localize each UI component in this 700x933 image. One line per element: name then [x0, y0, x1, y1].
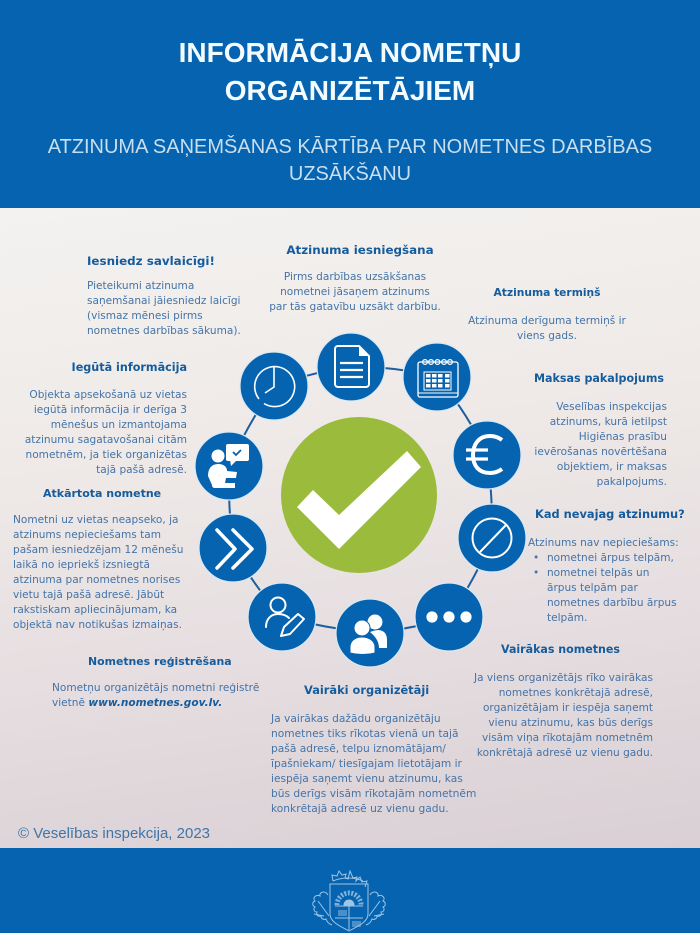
body: Atzinuma termiņš: Atzinuma derīguma termiņš ir: [468, 315, 626, 327]
icon: prohibited: [458, 504, 526, 572]
body: Kad nevajag atzinumu: [528, 537, 679, 624]
text block: Iegūtā informācija: [25, 361, 187, 476]
body: Vairākas nometnes: organizētājam ir iespēja saņemt: [483, 702, 653, 714]
icon: double chevron: [199, 514, 267, 582]
body: Vairāki organizētāji: nometnes tiks rīkotas vienā un tajā: [271, 727, 458, 740]
body: Atkārtota nometne: pašam iesniedzējam 12 mēnešu: [13, 544, 183, 556]
heading: Iegūtā informācija: Iegūtā informācija: [72, 361, 187, 374]
body: Atkārtota nometne: atzinums nepieciešams tam: [13, 529, 161, 541]
body: Atzinuma iesniegšana: [269, 271, 441, 313]
green centre circle with check mark: [281, 417, 437, 573]
body: Iegūtā informācija: iegūtā informācija ir derīga 3: [34, 404, 187, 416]
body: Iegūtā informācija: nometnēm, ja tiek organizētas: [26, 449, 187, 461]
text block: Atzinuma iesniegšana: [269, 243, 441, 313]
body: Iegūtā informācija: atzinumu sagatavošanai citām: [25, 434, 187, 446]
body: Vairāki organizētāji: īpašniekam/ tiesīgajam lietotājam ir: [271, 757, 462, 770]
heading: Kad nevajag atzinumu: Kad nevajag atzinumu?: [535, 507, 685, 521]
text block: Kad nevajag atzinumu: [528, 507, 685, 624]
body: Vairāki organizētāji: [270, 712, 476, 815]
text block: Atkārtota nometne: [13, 487, 183, 631]
body: Kad nevajag atzinumu: •: [533, 567, 539, 579]
body: Vairākas nometnes: nometnes konkrētajā adresē,: [499, 687, 653, 699]
body: Iegūtā informācija: Objekta apsekošanā uz vietas: [29, 389, 187, 401]
body: Iesniedz savlaicīgi: (vismaz mēnesi pirms: [87, 310, 203, 322]
body: Atkārtota nometne: laikā no iepriekš izsniegtā: [13, 559, 150, 571]
body: Atkārtota nometne: vietu tajā pašā adresē. Jābūt: [13, 589, 164, 601]
body: Nometnes reģistrēšana: [52, 682, 259, 709]
body: Iegūtā informācija: tajā pašā adresē.: [96, 464, 187, 476]
text block: Vairākas nometnes: [473, 643, 653, 759]
body: Iesniedz savlaicīgi: nometnes darbības sākuma).: [87, 325, 241, 337]
body: Vairākas nometnes: vienu atzinumu, kas būs derīgs: [488, 717, 653, 729]
body: Maksas pakalpojums: [534, 401, 667, 488]
title: INFORMĀCIJA NOMETŅU: [179, 37, 521, 68]
icon: calendar: [403, 343, 471, 411]
heading: Atzinuma termiņš: Atzinuma termiņš: [494, 286, 600, 299]
body: Atzinuma iesniegšana: nometnei jāsaņem atzinums: [280, 286, 430, 298]
body: Atzinuma iesniegšana: par tās gatavību uzsākt darbību.: [269, 301, 441, 313]
body: Kad nevajag atzinumu: ārpus telpām par: [547, 582, 638, 594]
body: Atzinuma termiņš: [468, 315, 626, 342]
heading: Vairākas nometnes: Vairākas nometnes: [501, 643, 620, 656]
body: Maksas pakalpojums: pakalpojums.: [597, 476, 667, 488]
heading: Nometnes reģistrēšana: Nometnes reģistrēšana: [88, 655, 232, 668]
body: Atkārtota nometne: objektā nav notikušas izmaiņas.: [13, 619, 182, 631]
body: Vairāki organizētāji: pašā adresē, telpu iznomātājam/: [271, 742, 446, 755]
title: [179, 37, 521, 106]
subtitle: ATZINUMA SAŅEMŠANAS KĀRTĪBA PAR NOMETNES DARBĪBAS: [48, 136, 652, 158]
text block: Vairāki organizētāji: [270, 683, 476, 815]
body: Atkārtota nometne: rakstiskam apliecinājumam, ka: [13, 604, 177, 616]
subtitle: [48, 135, 652, 185]
body: Vairāki organizētāji: konkrētajā adresē uz vienu gadu.: [271, 802, 449, 815]
body: Kad nevajag atzinumu: nometnei telpās un: [547, 567, 649, 579]
body: Iegūtā informācija: mēnešus un izmantojama: [51, 419, 187, 431]
text block: Iesniedz savlaicīgi: [87, 254, 241, 337]
icon: person with pencil: [248, 583, 316, 651]
footer band: [0, 848, 700, 933]
heading: Iesniedz savlaicīgi: Iesniedz savlaicīgi!: [87, 254, 215, 268]
body: Kad nevajag atzinumu: •: [533, 552, 539, 564]
body: Kad nevajag atzinumu: Atzinums nav nepieciešams:: [528, 537, 679, 549]
icon: person with speech bubble: [195, 432, 263, 500]
text block: Nometnes reģistrēšana: [52, 655, 259, 709]
body: Maksas pakalpojums: objektiem, ir maksas: [557, 461, 667, 473]
text block: Atzinuma termiņš: [468, 286, 626, 342]
body: Atzinuma termiņš: viens gads.: [517, 330, 577, 342]
body: Atkārtota nometne: atzinuma par nometnes norises: [13, 574, 180, 586]
body: Atkārtota nometne: Nometni uz vietas neapseko, ja: [13, 514, 178, 526]
body: Maksas pakalpojums: atzinums, kurā ietilpst: [550, 416, 667, 428]
body: Iesniedz savlaicīgi: [87, 280, 241, 337]
title: ORGANIZĒTĀJIEM: [225, 75, 475, 106]
body: Kad nevajag atzinumu: telpām.: [547, 612, 587, 624]
icon: three dots: [415, 583, 483, 651]
header band: [0, 0, 700, 208]
heading: Atzinuma iesniegšana: Atzinuma iesniegšana: [286, 243, 434, 257]
ring connectors: [229, 367, 492, 633]
body: Atzinuma iesniegšana: Pirms darbības uzsākšanas: [284, 271, 426, 283]
background panel: [0, 208, 700, 848]
body: Vairākas nometnes: visām viņa rīkotajām nometnēm: [482, 732, 653, 744]
body: Vairākas nometnes: Ja viens organizētājs rīko vairākas: [474, 672, 653, 684]
heading: Atkārtota nometne: Atkārtota nometne: [43, 487, 161, 500]
body: Maksas pakalpojums: ievērošanas novērtēšana: [534, 446, 667, 458]
body: Vairāki organizētāji: Ja vairākas dažādu organizētāju: [271, 712, 441, 725]
icon: document: [317, 333, 385, 401]
copyright: © Veselības inspekcija, 2023: [18, 825, 210, 842]
icon: group of people: [336, 599, 404, 667]
body: Kad nevajag atzinumu: nometnes darbību ārpus: [547, 597, 677, 609]
body: Vairākas nometnes: konkrētajā adresē uz vienu gadu.: [477, 747, 653, 759]
body: Maksas pakalpojums: Veselības inspekcijas: [556, 401, 667, 413]
icon: clock: [240, 352, 308, 420]
icon: coat of arms: [312, 870, 386, 932]
text block: Maksas pakalpojums: [534, 372, 667, 488]
body: Vairākas nometnes: [473, 672, 653, 759]
body: Iesniedz savlaicīgi: saņemšanai jāiesniedz laicīgi: [87, 295, 240, 307]
body: Iegūtā informācija: [25, 389, 187, 476]
body: Kad nevajag atzinumu: nometnei ārpus telpām,: [547, 552, 674, 564]
body: Atkārtota nometne: [13, 514, 183, 631]
heading: Vairāki organizētāji: Vairāki organizētāji: [304, 683, 429, 697]
body: Nometnes reģistrēšana: Nometņu organizētājs nometni reģistrē: [52, 682, 259, 694]
icon: euro: [453, 421, 521, 489]
subtitle: UZSĀKŠANU: [289, 163, 411, 185]
body: Iesniedz savlaicīgi: Pieteikumi atzinuma: [87, 280, 194, 292]
body: Nometnes reģistrēšana: vietnē www.nometnes.gov.lv.: [52, 697, 222, 709]
body: Maksas pakalpojums: Higiēnas prasību: [579, 431, 667, 443]
body: Vairāki organizētāji: iespēja saņemt vienu atzinumu, kas: [271, 772, 463, 785]
heading: Maksas pakalpojums: Maksas pakalpojums: [534, 372, 664, 385]
body: Vairāki organizētāji: būs derīgs visām rīkotajām nometnēm: [271, 787, 476, 800]
